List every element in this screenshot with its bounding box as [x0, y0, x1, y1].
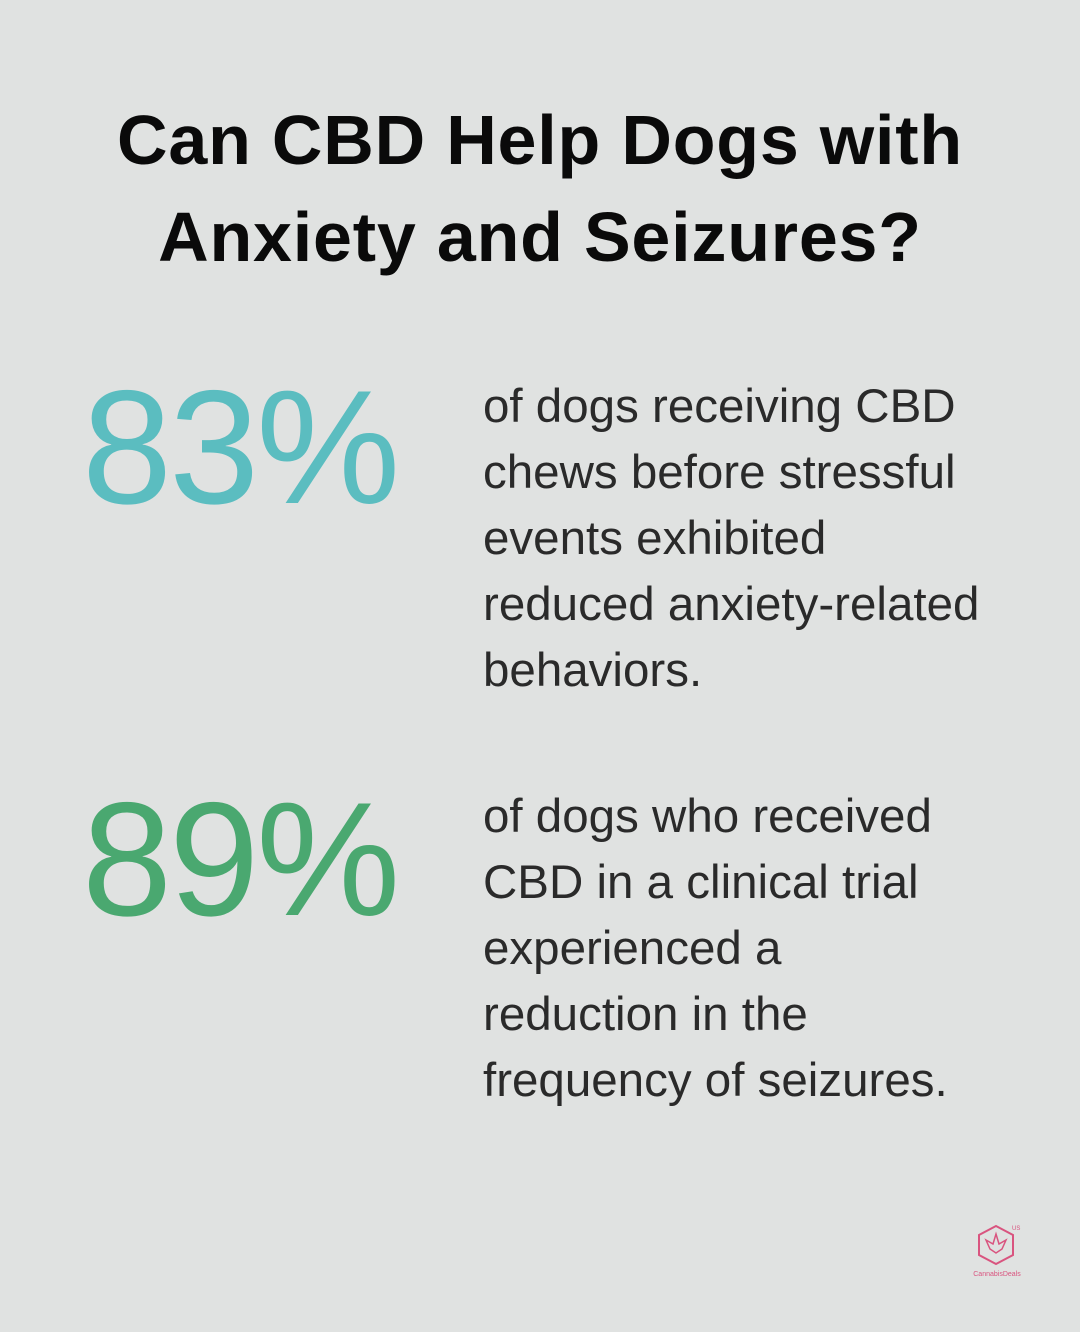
stat: 89%: 89% — [82, 769, 397, 950]
text: seizure stat: experienced a — [483, 922, 781, 975]
text: seizure stat — [483, 790, 948, 1107]
text: anxiety stat: behaviors. — [483, 644, 702, 697]
text: seizure stat: frequency of seizures. — [483, 1054, 948, 1107]
stat: 83%: 83% — [82, 357, 397, 538]
text: anxiety stat: of dogs receiving CBD — [483, 380, 956, 433]
text: seizure stat: of dogs who received — [483, 790, 932, 843]
text: anxiety stat: chews before stressful — [483, 446, 956, 499]
title: Can CBD Help Dogs with — [117, 101, 963, 179]
logo — [973, 1224, 1021, 1278]
text: seizure stat: CBD in a clinical trial — [483, 856, 919, 909]
logo: US — [1012, 1226, 1020, 1232]
text: anxiety stat: reduced anxiety-related — [483, 578, 979, 631]
title: Anxiety and Seizures? — [158, 198, 922, 276]
text: seizure stat: reduction in the — [483, 988, 808, 1041]
title — [117, 101, 963, 276]
logo: CannabisDeals — [973, 1271, 1021, 1278]
text: anxiety stat — [483, 380, 979, 697]
text: anxiety stat: events exhibited — [483, 512, 826, 565]
